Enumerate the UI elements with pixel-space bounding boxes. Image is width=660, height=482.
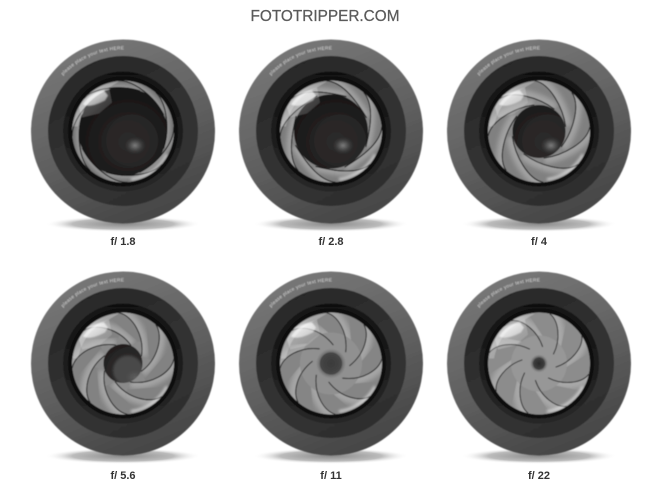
shadow: f/1.8 [45, 216, 201, 232]
label: f/4: f/ 4 [531, 236, 548, 248]
title: FOTOTRIPPER.COM [250, 8, 400, 25]
lens: f/2.8 [239, 40, 423, 224]
lens: f/1.8 [31, 40, 215, 224]
shadow: f/22 [461, 448, 617, 464]
lens: f/5.6 [31, 272, 215, 456]
label: f/5.6: f/ 5.6 [110, 470, 136, 482]
label: f/2.8: f/ 2.8 [318, 236, 344, 248]
label: f/1.8: f/ 1.8 [110, 236, 136, 248]
shadow: f/2.8 [253, 216, 409, 232]
shadow: f/5.6 [45, 448, 201, 464]
shadow: f/4 [461, 216, 617, 232]
label: f/22: f/ 22 [528, 470, 550, 482]
shadow: f/11 [253, 448, 409, 464]
lens: f/4 [447, 40, 631, 224]
lens: f/22 [447, 272, 631, 456]
lens: f/11 [239, 272, 423, 456]
label: f/11: f/ 11 [320, 470, 342, 482]
